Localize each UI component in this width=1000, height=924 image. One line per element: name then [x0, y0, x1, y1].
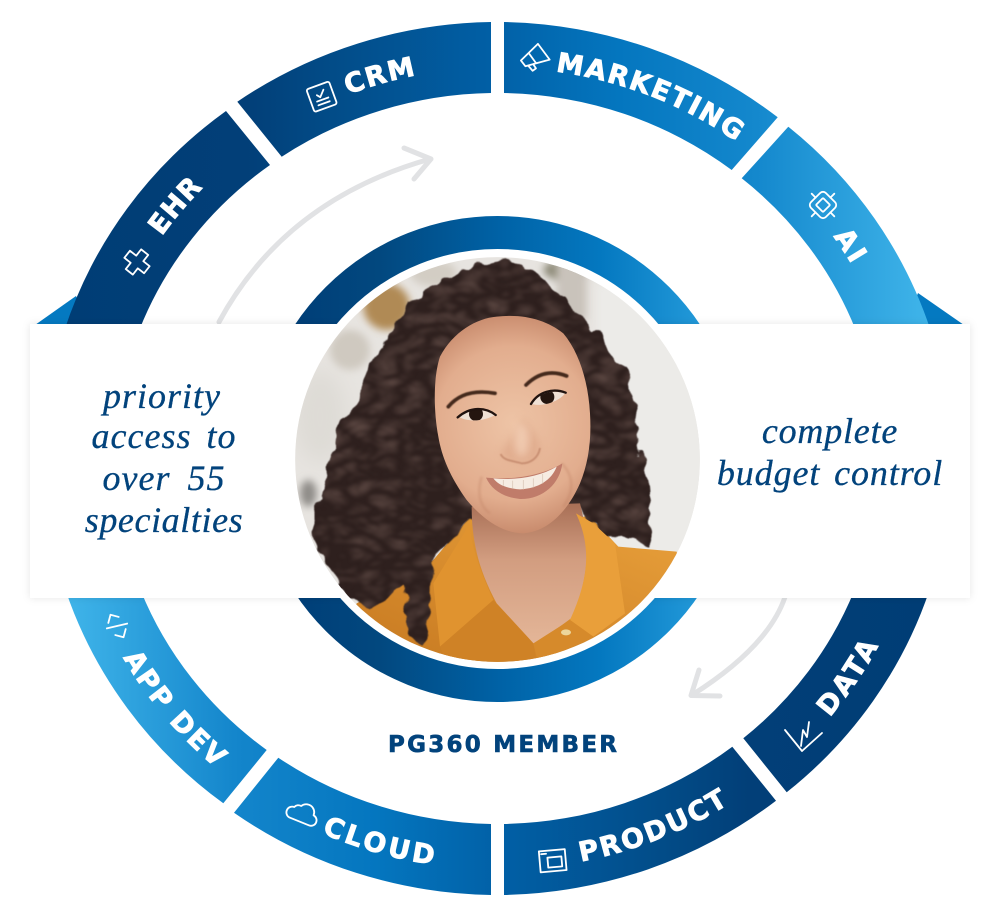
icon: medical cross [119, 244, 155, 280]
arrow: bottom clockwise [691, 597, 785, 696]
icon: megaphone [518, 42, 551, 73]
segment: DATA [743, 598, 927, 792]
text: priority access: priority [100, 376, 221, 416]
text: priority access: access to [92, 416, 236, 456]
photo: smiling woman [290, 250, 710, 670]
segment: DATA: DATA [815, 642, 879, 716]
segment: AI [742, 126, 928, 324]
segment: AI: AI [832, 230, 868, 263]
text: priority access: over 55 [103, 458, 225, 498]
mouth [486, 463, 562, 499]
white center panel [30, 324, 970, 598]
segment: APP DEV: APP DEV [122, 653, 230, 764]
shirt collar [433, 513, 625, 663]
right blue triangle accent [905, 293, 964, 325]
heading: PG360 MEMBER: PG360 MEMBER [388, 732, 617, 758]
neck [472, 503, 587, 645]
text: budget control: complete [762, 411, 898, 451]
segment: CRM: CRM [344, 56, 414, 92]
icon: chip [800, 182, 846, 228]
icon: line chart [785, 722, 822, 751]
segment: MARKETING: MARKETING [558, 52, 745, 140]
hair [313, 260, 654, 647]
segment: PRODUCT [504, 746, 776, 895]
left blue triangle accent [35, 296, 90, 325]
inner blue ring [271, 232, 724, 686]
text: budget control: budget control [717, 453, 943, 493]
nose shading [504, 423, 538, 461]
shirt body [356, 516, 677, 662]
icon: browser window [539, 849, 567, 872]
segment: CRM [237, 22, 491, 157]
text: priority access [85, 376, 243, 540]
eyes [460, 410, 494, 420]
cheek lines [479, 463, 571, 513]
segment: MARKETING [504, 22, 778, 170]
segment: EHR [66, 111, 270, 324]
photo background [295, 257, 700, 604]
segment: CLOUD: CLOUD [325, 818, 434, 864]
arrow: top clockwise [219, 148, 431, 322]
segment: CLOUD [234, 758, 491, 895]
white halo around photo [288, 250, 707, 668]
segment: APP DEV [68, 598, 267, 804]
icon: cloud [285, 798, 321, 827]
text: priority access: specialties [85, 500, 243, 540]
face [435, 316, 590, 533]
segment: EHR: EHR [146, 178, 204, 235]
segment: PRODUCT: PRODUCT [578, 786, 724, 862]
icon: checklist [306, 81, 337, 112]
text: budget control [717, 411, 943, 493]
brows [448, 392, 495, 407]
icon: code brackets [102, 610, 132, 642]
